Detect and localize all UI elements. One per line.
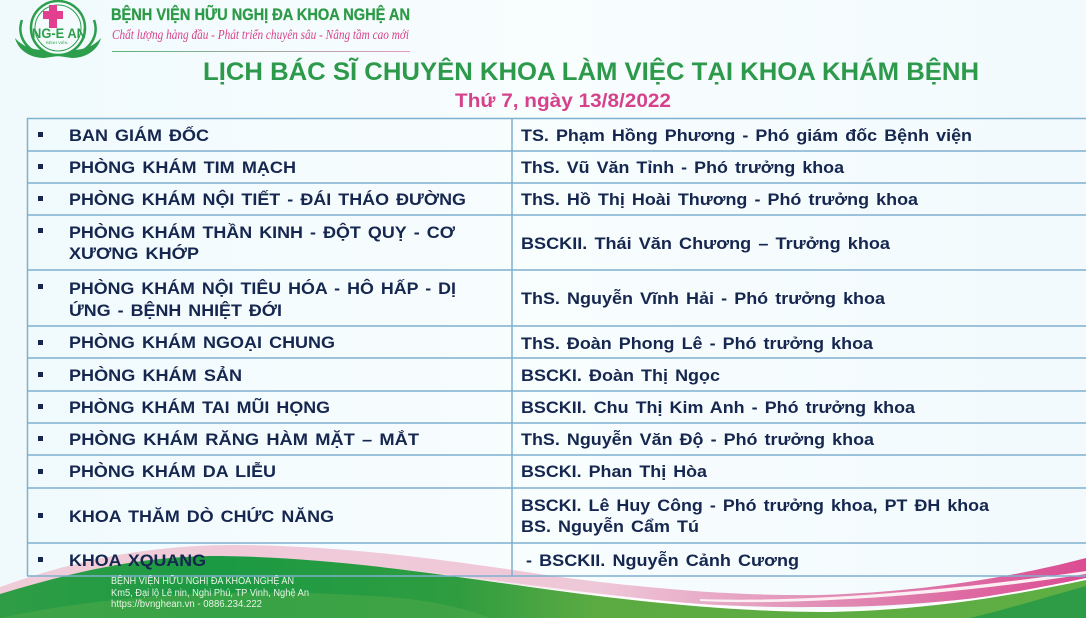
footer contact text: Km5, Đại lộ Lê nin, Nghi Phú, TP Vinh, Nghệ An (111, 588, 309, 599)
bullets (38, 132, 43, 562)
doctor names: BSCKII. Thái Văn Chương – Trưởng khoa (521, 234, 891, 253)
department names: KHOA THĂM DÒ CHỨC NĂNG (69, 507, 334, 526)
doctor names: BS. Nguyễn Cẩm Tú (521, 517, 699, 536)
hospital logo: NG-E AN (32, 25, 86, 41)
doctor names: BSCKI. Phan Thị Hòa (521, 462, 708, 481)
doctor names: TS. Phạm Hồng Phương - Phó giám đốc Bệnh viện (521, 126, 972, 145)
footer contact text: BỆNH VIỆN HỮU NGHỊ ĐA KHOA NGHỆ AN (111, 574, 294, 587)
hospital logo (15, 1, 101, 58)
footer contact text: https://bvnghean.vn - 0886.234.222 (111, 599, 262, 610)
doctor names: BSCKI. Lê Huy Công - Phó trưởng khoa, PT ĐH khoa (521, 496, 990, 515)
doctor names: BSCKII. Chu Thị Kim Anh - Phó trưởng khoa (521, 398, 916, 417)
department names: PHÒNG KHÁM NỘI TIẾT - ĐÁI THÁO ĐƯỜNG (69, 190, 466, 209)
doctor names: ThS. Đoàn Phong Lê - Phó trưởng khoa (521, 334, 874, 353)
doctor names: BSCKI. Đoàn Thị Ngọc (521, 366, 720, 385)
department names: PHÒNG KHÁM THẦN KINH - ĐỘT QUỴ - CƠ (69, 223, 456, 242)
doctor names: ThS. Vũ Văn Tỉnh - Phó trưởng khoa (521, 158, 845, 177)
hospital name: BỆNH VIỆN HỮU NGHỊ ĐA KHOA NGHỆ AN (111, 4, 410, 24)
doctor names: ThS. Nguyễn Văn Độ - Phó trưởng khoa (521, 430, 875, 449)
department names: XƯƠNG KHỚP (69, 244, 199, 263)
department names: PHÒNG KHÁM DA LIỄU (69, 462, 276, 481)
footer contact text (111, 574, 309, 610)
department names (69, 125, 466, 570)
department names: PHÒNG KHÁM NGOẠI CHUNG (69, 333, 335, 352)
header divider (112, 51, 410, 52)
hospital logo: BỆNH VIỆN (46, 40, 68, 45)
department names: PHÒNG KHÁM SẢN (69, 366, 242, 385)
doctor names (521, 126, 990, 570)
department names: BAN GIÁM ĐỐC (69, 125, 209, 145)
department names: PHÒNG KHÁM RĂNG HÀM MẶT – MẮT (69, 430, 420, 449)
department names: PHÒNG KHÁM NỘI TIÊU HÓA - HÔ HẤP - DỊ (69, 279, 456, 298)
doctor names: - BSCKII. Nguyễn Cảnh Cương (526, 551, 799, 570)
title: LỊCH BÁC SĨ CHUYÊN KHOA LÀM VIỆC TẠI KHOA KHÁM BỆNH (203, 56, 979, 86)
doctor names: ThS. Nguyễn Vĩnh Hải - Phó trưởng khoa (521, 289, 886, 308)
footer wave: pink, white and green hills (0, 545, 1086, 618)
doctor names: ThS. Hồ Thị Hoài Thương - Phó trưởng khoa (521, 190, 919, 209)
date subtitle: Thứ 7, ngày 13/8/2022 (455, 91, 671, 112)
department names: PHÒNG KHÁM TIM MẠCH (69, 158, 296, 177)
schedule table (27, 118, 1086, 576)
department names: PHÒNG KHÁM TAI MŨI HỌNG (69, 397, 330, 417)
white stripe between the pink ribbons (700, 571, 1086, 602)
department names: ỨNG - BỆNH NHIỆT ĐỚI (69, 301, 282, 320)
slogan: Chất lượng hàng đầu - Phát triển chuyên sâu - Nâng tầm cao mới (112, 28, 409, 43)
department names: KHOA XQUANG (69, 551, 206, 570)
